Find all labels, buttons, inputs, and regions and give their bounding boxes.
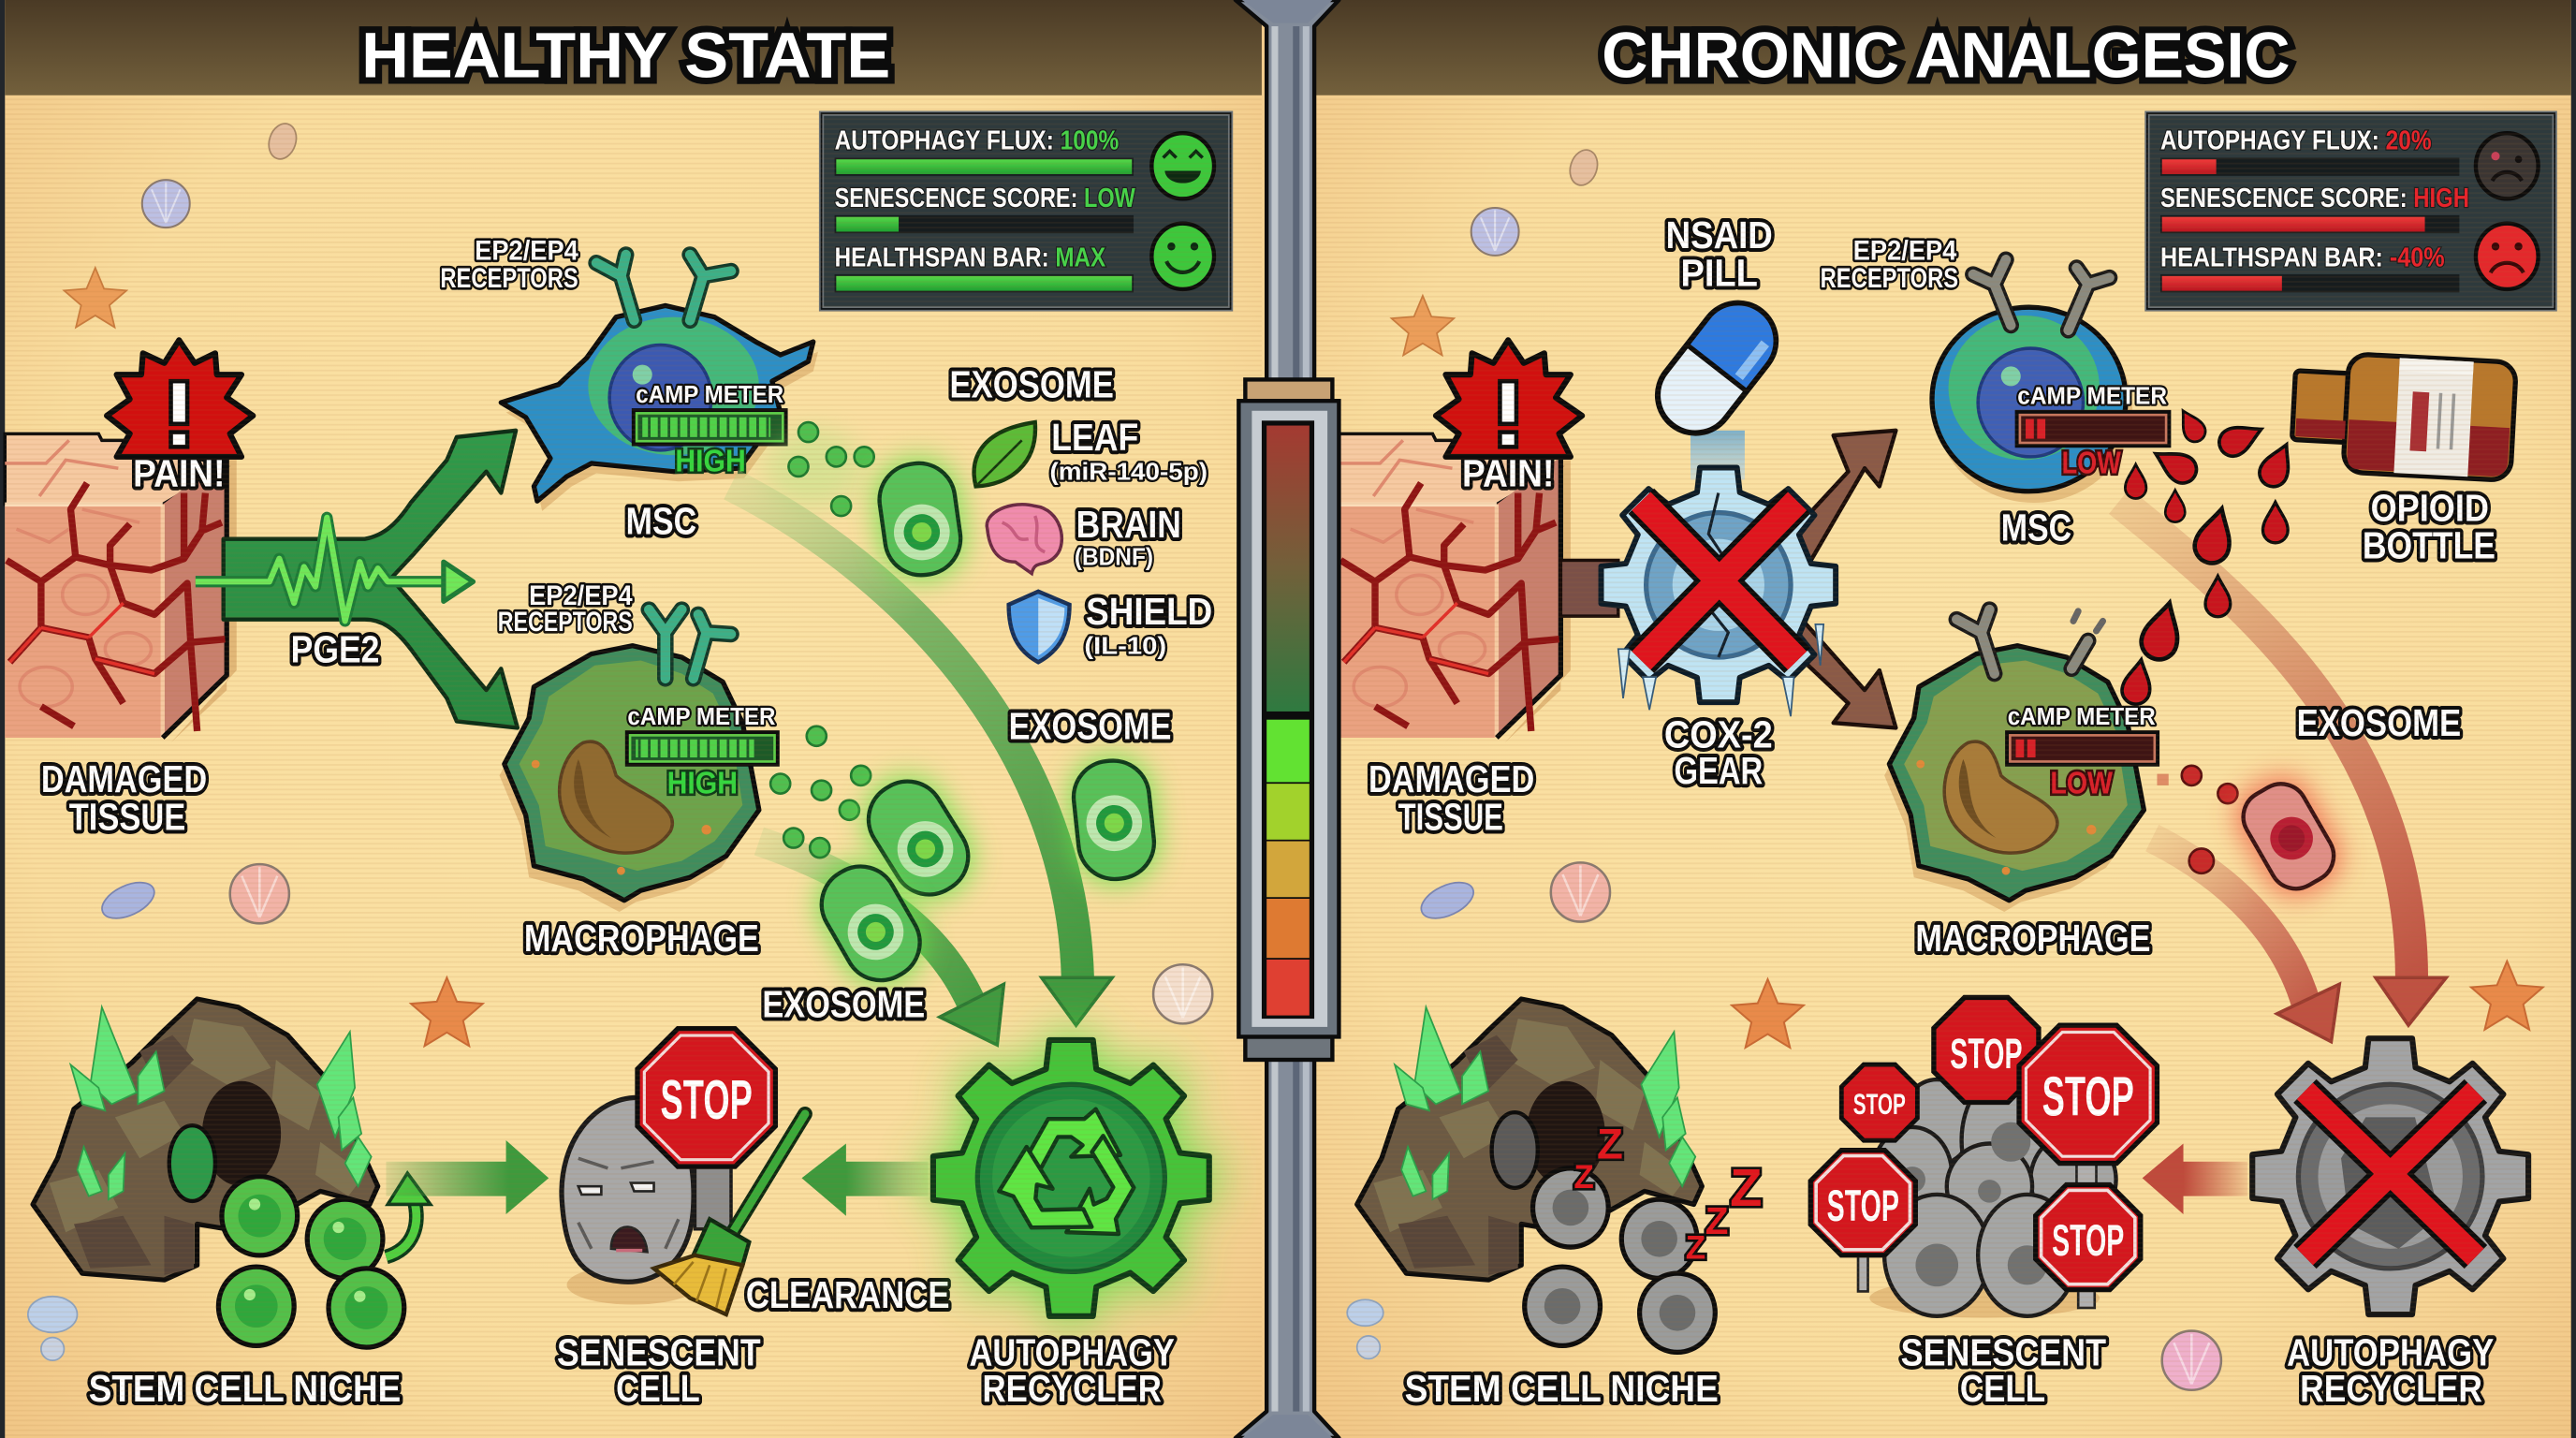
cargo: brain: BRAIN (1076, 503, 1181, 546)
label: autophagy recycler: AUTOPHAGY (970, 1330, 1175, 1373)
panel: healthy state (5, 0, 1266, 1438)
exosome group and vesicles (762, 363, 1171, 1025)
camp meter macrophage (2008, 702, 2157, 801)
stats panel right: AUTOPHAGY FLUX: 20% (2160, 126, 2432, 156)
camp meter msc: cAMP METER (636, 380, 783, 408)
camp meter msc: cAMP METER (2017, 382, 2167, 410)
cargo: leaf: (miR-140-5p) (1050, 457, 1208, 485)
header band (5, 0, 1262, 95)
label: senescent cell: SENESCENT (1901, 1330, 2106, 1373)
opioid bottle (2291, 351, 2516, 480)
icon: recycle arrows (987, 1109, 1157, 1258)
label: stem cell niche: STEM CELL NICHE (89, 1367, 401, 1410)
camp meter msc: LOW (2062, 446, 2121, 480)
label: receptors msc: RECEPTORS (1821, 263, 1958, 294)
label: pain: PAIN! (133, 451, 225, 494)
pain gauge (1238, 379, 1339, 1060)
cargo: shield: SHIELD (1086, 590, 1212, 633)
nsaid pill (1643, 287, 1791, 448)
label: msc: MSC (626, 499, 696, 542)
label: cox-2 gear: COX-2 (1664, 713, 1773, 756)
damaged tissue block (5, 433, 237, 742)
cargo: leaf: LEAF (1051, 416, 1138, 459)
pge2 pulse line (196, 518, 473, 621)
label: damaged tissue: DAMAGED (41, 757, 207, 800)
sleep icons zzz: Z (1705, 1199, 1728, 1242)
label: cox-2 gear: GEAR (1674, 749, 1763, 792)
curved arrow: msc to recycler (731, 429, 1112, 1025)
label: nsaid pill (1666, 213, 1773, 294)
title: chronic analgesic: CHRONIC ANALGESIC (1602, 19, 2291, 91)
icon: red sad face (2476, 224, 2539, 289)
label: receptors macrophage: EP2/EP4 (529, 580, 633, 611)
cox-2 gear frozen (1602, 467, 1836, 716)
cargo: leaf (974, 416, 1208, 486)
label: autophagy recycler: AUTOPHAGY (2287, 1330, 2494, 1373)
label: damaged tissue: DAMAGED (1368, 757, 1534, 800)
label: damaged tissue: TISSUE (1398, 795, 1503, 838)
receptors (1973, 259, 2110, 330)
label: cox-2 gear (1664, 713, 1773, 792)
camp meter macrophage: LOW (2050, 767, 2114, 801)
label: senescent cell (1901, 1330, 2106, 1410)
pge2 arrows (224, 431, 518, 727)
damaged tissue block (1339, 433, 1571, 742)
camp meter macrophage: cAMP METER (2008, 702, 2156, 730)
stats panel right: HEALTHSPAN BAR: -40% (2160, 242, 2445, 272)
stats panel left: AUTOPHAGY FLUX: 100% (835, 126, 1119, 156)
curved arrow: macrophage to recycler (2152, 838, 2339, 1042)
stats panel right (2147, 113, 2554, 309)
pain burst (107, 340, 253, 457)
label: opioid bottle: BOTTLE (2363, 524, 2496, 567)
stop signs cluster: STOP (2042, 1065, 2134, 1128)
label: autophagy recycler: RECYCLER (983, 1367, 1162, 1410)
label: nsaid pill: PILL (1680, 251, 1758, 294)
label: pge2: PGE2 (291, 627, 379, 670)
sand decorations (1347, 146, 2543, 1390)
label: damaged tissue: TISSUE (69, 795, 185, 838)
label: msc: MSC (2001, 506, 2071, 549)
title: healthy state: HEALTHY STATE (361, 19, 890, 91)
msc cell (1932, 259, 2132, 503)
sleep icons zzz: Z (1573, 1159, 1594, 1196)
sleep icons zzz: Z (1686, 1229, 1705, 1266)
red x (2305, 1091, 2476, 1257)
arrow: self renewal (386, 1173, 431, 1257)
blood drops (2120, 405, 2299, 706)
panel scanlines (5, 95, 1262, 1438)
dormant plug cell (1492, 1112, 1538, 1188)
stop signs cluster: STOP (1827, 1181, 1899, 1231)
stem cell cave (33, 999, 378, 1280)
label: autophagy recycler (970, 1330, 1175, 1410)
arrow: recycler to senescent (801, 1143, 929, 1216)
red x (1641, 501, 1797, 661)
label: receptors msc (440, 235, 578, 294)
sleep icons zzz: Z (1597, 1120, 1623, 1167)
msc cell (501, 255, 818, 511)
macrophage cell (1884, 609, 2144, 912)
stop sign (637, 1029, 775, 1229)
camp meter macrophage: cAMP METER (627, 702, 775, 730)
senescent cell (562, 1097, 698, 1304)
blocked stub arrow (1560, 560, 1618, 616)
curved arrow: macrophage to recycler (759, 842, 1003, 1045)
label: damaged tissue (1368, 757, 1534, 838)
pain burst (1436, 340, 1582, 457)
icon: dark sad face (2476, 133, 2539, 198)
label: senescent cell: CELL (1960, 1367, 2045, 1410)
broom (654, 1114, 805, 1314)
autophagy recycler gear (927, 1034, 1216, 1323)
central steel column (1236, 0, 1339, 1438)
label: exosome: EXOSOME (2297, 701, 2461, 744)
label: receptors msc: EP2/EP4 (475, 235, 578, 266)
curved arrow: msc to recycler (2119, 501, 2446, 1025)
sleep icons zzz (1573, 1120, 1762, 1266)
icon: smiling face (1151, 224, 1214, 289)
stats panel left: HEALTHSPAN BAR: MAX (835, 242, 1106, 272)
stop signs cluster (1810, 997, 2157, 1308)
label: autophagy recycler (2287, 1330, 2494, 1410)
exosome capsules (799, 451, 1164, 1003)
stop signs cluster: STOP (2052, 1216, 2124, 1266)
label: exosome top: EXOSOME (949, 363, 1114, 406)
cargo: brain (987, 503, 1181, 574)
damaged exosome and vesicles (2157, 763, 2354, 909)
label: receptors macrophage: RECEPTORS (498, 607, 633, 638)
icon: grinning face (1151, 133, 1214, 198)
arrow: stem niche to senescent (386, 1140, 549, 1214)
label: opioid bottle (2363, 486, 2496, 567)
label: senescent cell (557, 1330, 761, 1410)
label: macrophage: MACROPHAGE (1915, 917, 2150, 960)
beam from pill to gear (1690, 431, 1745, 479)
label: senescent cell: SENESCENT (557, 1330, 761, 1373)
arrow: recycler to senescent (2143, 1143, 2247, 1214)
stats panel left (822, 113, 1231, 309)
label: receptors msc: RECEPTORS (440, 263, 578, 294)
panel: chronic analgesic (1314, 0, 2571, 1438)
sleep icons zzz: Z (1730, 1158, 1762, 1217)
label: receptors msc: EP2/EP4 (1853, 235, 1957, 266)
label: exosome middle: EXOSOME (1009, 705, 1171, 748)
senescent cell pile (1869, 1071, 2116, 1318)
panel background: sand (1314, 0, 2571, 1438)
label: nsaid pill: NSAID (1666, 213, 1773, 257)
header band (1314, 0, 2571, 95)
sand decorations (28, 120, 1212, 1360)
label: macrophage: MACROPHAGE (524, 917, 759, 960)
stop sign: STOP (661, 1068, 753, 1131)
cargo: shield (1009, 590, 1212, 662)
label: exosome lower: EXOSOME (762, 982, 925, 1025)
label: receptors msc (1821, 235, 1958, 294)
label: senescent cell: CELL (616, 1367, 700, 1410)
label: autophagy recycler: RECYCLER (2300, 1367, 2482, 1410)
label: clearance: CLEARANCE (746, 1273, 949, 1316)
stop signs cluster: STOP (1853, 1087, 1906, 1121)
dormant stem cells (1525, 1168, 1715, 1352)
label: pain: PAIN! (1462, 451, 1554, 494)
panel scanlines (1314, 95, 2571, 1438)
camp meter msc (2017, 382, 2169, 480)
camp meter msc (634, 380, 785, 479)
label: receptors macrophage (498, 580, 633, 638)
stats panel right: SENESCENCE SCORE: HIGH (2160, 183, 2469, 213)
stats panel left: SENESCENCE SCORE: LOW (835, 183, 1135, 213)
cargo: brain: (BDNF) (1075, 543, 1153, 571)
plug cell in cave (169, 1125, 215, 1201)
camp meter macrophage (627, 702, 777, 801)
label: stem cell niche: STEM CELL NICHE (1405, 1367, 1719, 1410)
receptors (596, 255, 731, 320)
label: opioid bottle: OPIOID (2371, 486, 2489, 529)
cargo: shield: (IL-10) (1084, 632, 1166, 660)
brown arrows from cox-2 gear (1788, 431, 1895, 727)
label: damaged tissue (41, 757, 207, 838)
macrophage cell (500, 609, 759, 912)
stop signs cluster: STOP (1950, 1030, 2023, 1078)
panel background: sand (5, 0, 1266, 1438)
broken receptors (1956, 609, 2103, 674)
broken autophagy recycler gear (2252, 1038, 2528, 1314)
stem cells (218, 1177, 404, 1347)
camp meter msc: HIGH (675, 445, 746, 479)
camp meter macrophage: HIGH (667, 767, 738, 801)
receptors (649, 609, 731, 679)
stem cell cave (1357, 999, 1702, 1280)
